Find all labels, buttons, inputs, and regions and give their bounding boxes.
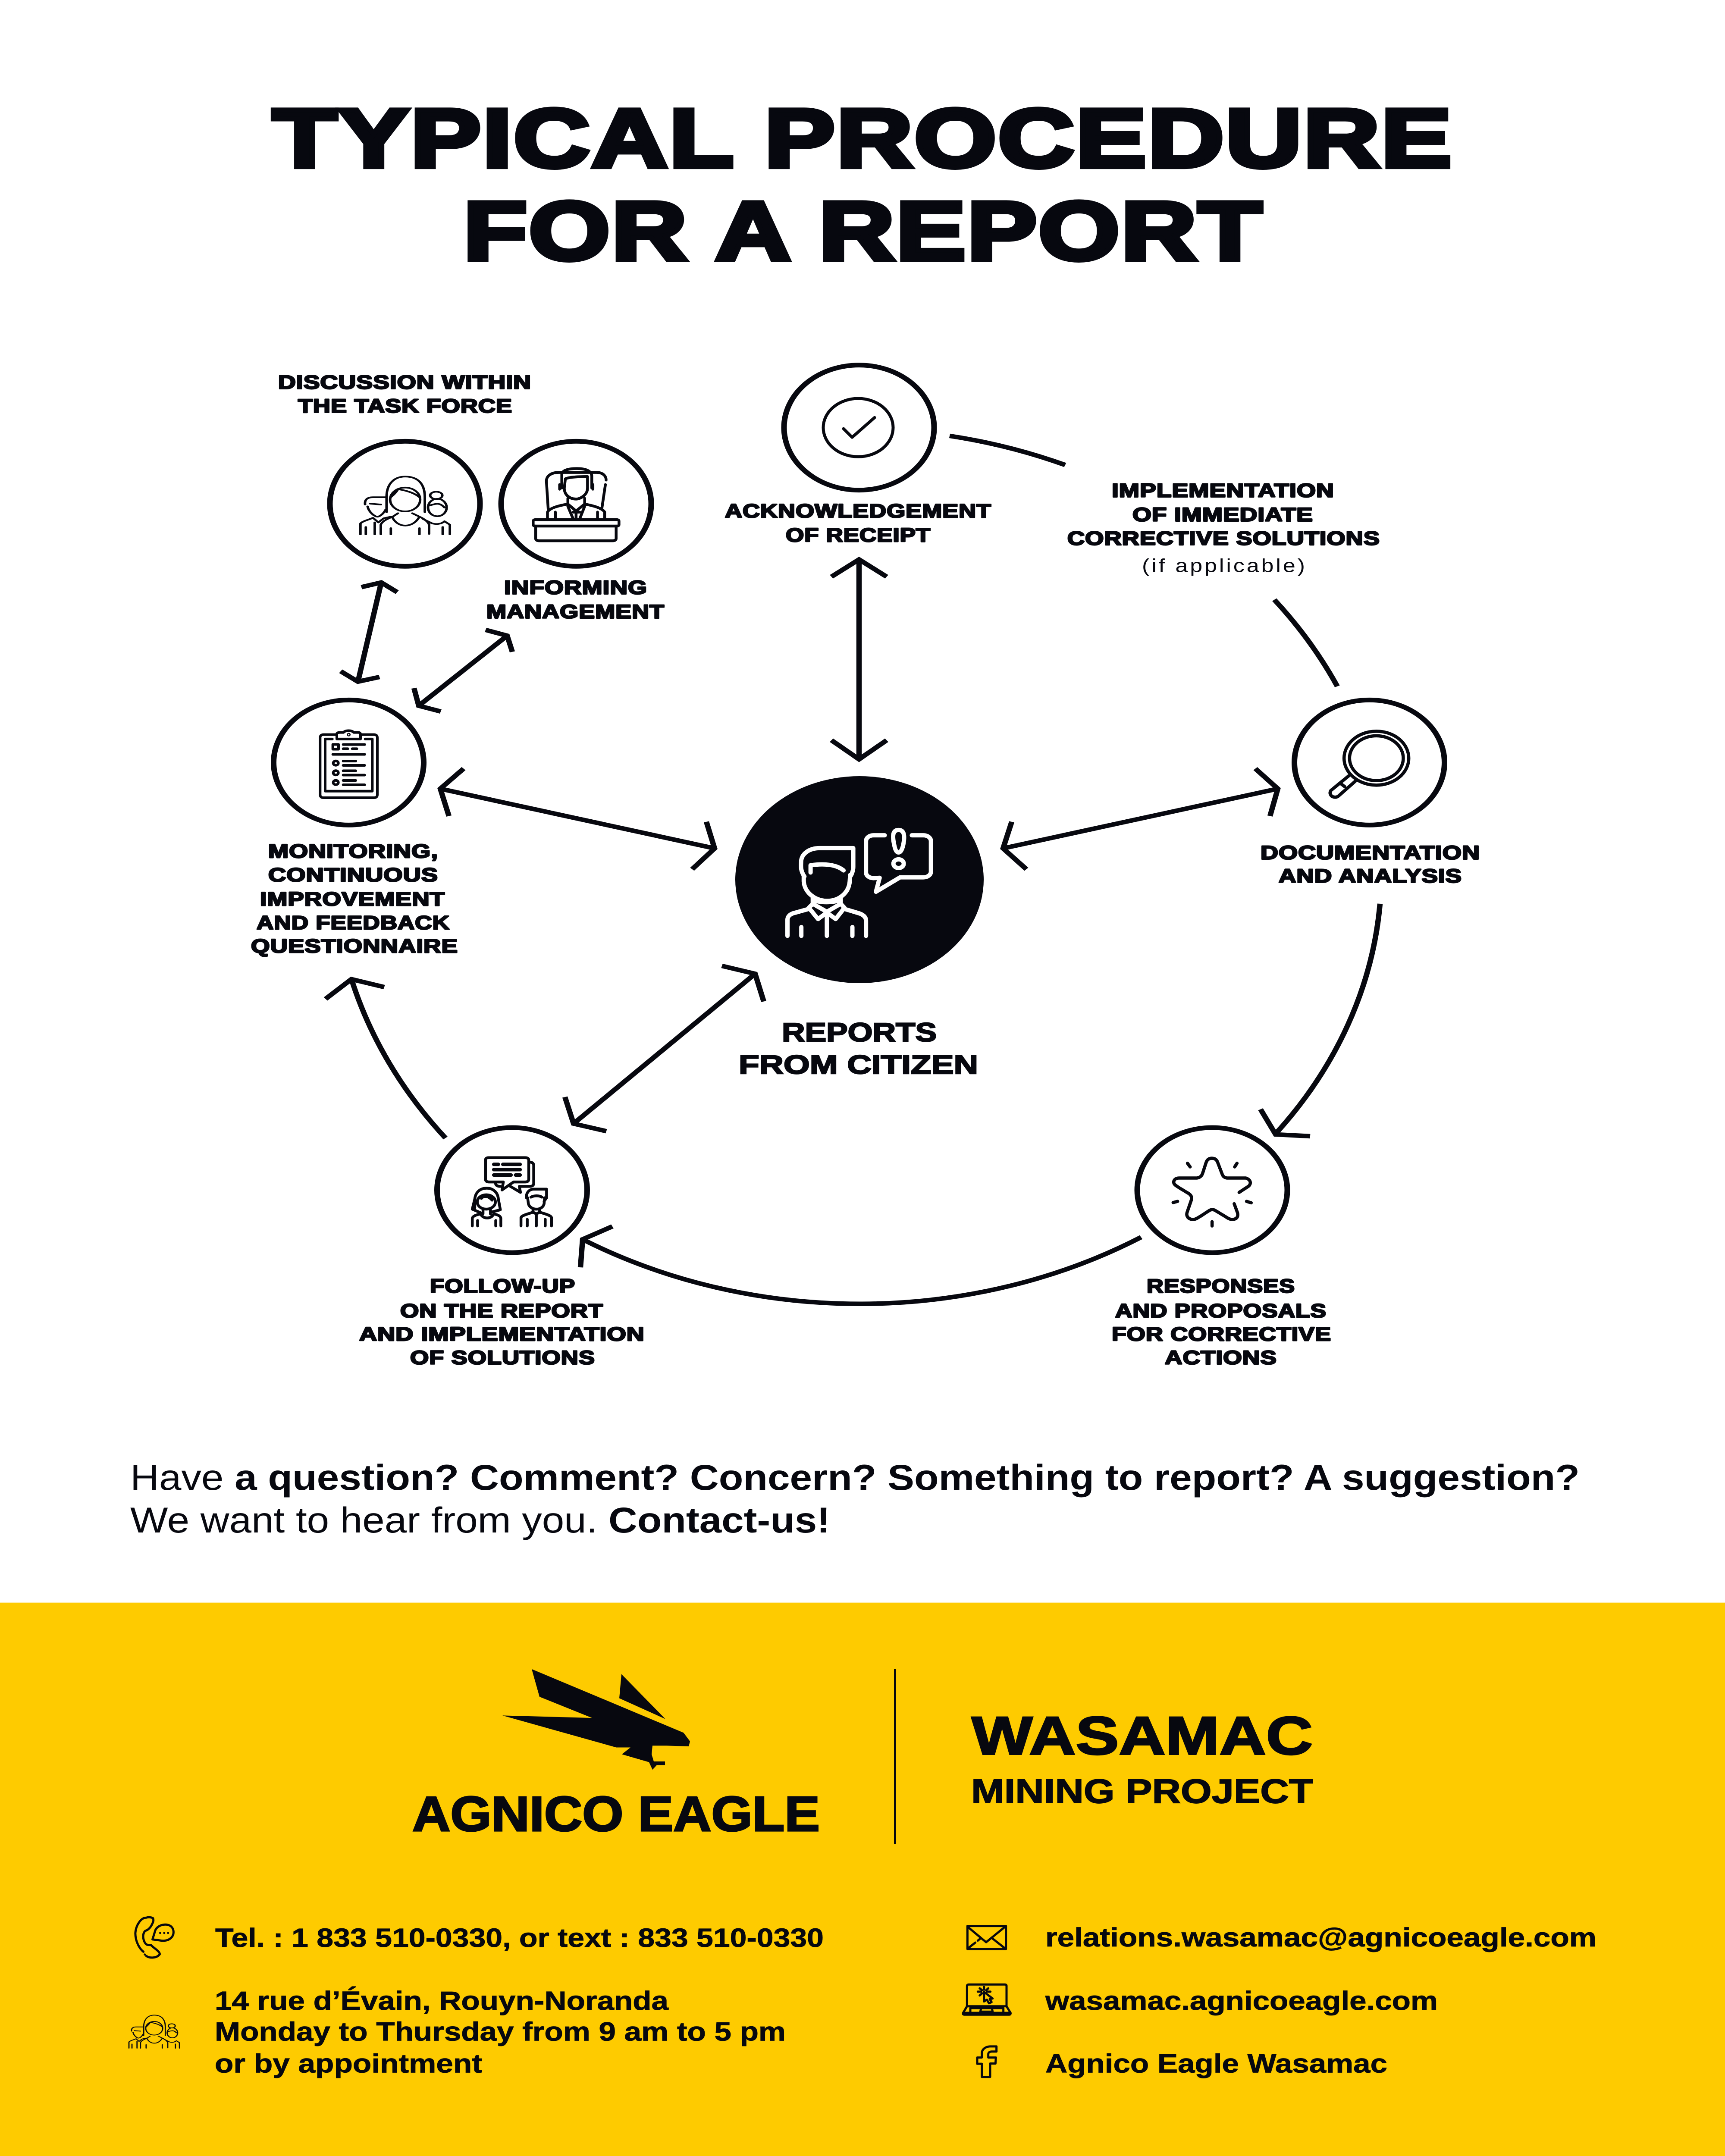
title [273, 92, 1453, 277]
label: discussion: DISCUSSION WITHIN [278, 372, 531, 393]
icon: laptop with cursor [963, 1984, 1010, 2015]
label: reports from citizen: REPORTS [782, 1018, 937, 1047]
icon: phone with chat bubble [135, 1917, 173, 1958]
label: responses: FOR CORRECTIVE [1112, 1324, 1331, 1345]
contact: facebook: Agnico Eagle Wasamac [1045, 2049, 1387, 2078]
label: responses: ACTIONS [1165, 1347, 1277, 1368]
label: discussion [278, 372, 531, 417]
logo: Agnico Eagle [412, 1669, 820, 1841]
node: discussion within the task force [278, 372, 531, 566]
node: informing management [486, 441, 665, 622]
label: monitoring: AND FEEDBACK [257, 912, 450, 934]
node: monitoring and feedback [251, 700, 458, 957]
cycle arcs and arrows [326, 436, 1380, 1304]
call to action text: Have a question? Comment? Concern? Something to report? A suggestion? [130, 1457, 1580, 1498]
label: reports from citizen: FROM CITIZEN [739, 1050, 978, 1080]
label: monitoring: QUESTIONNAIRE [251, 936, 458, 957]
icon: clipboard [320, 730, 377, 798]
node: documentation and analysis [1261, 700, 1480, 887]
node: acknowledgement of receipt [725, 365, 991, 546]
contact: email: relations.wasamac@agnicoeagle.com [1045, 1923, 1596, 1952]
arrow: documentation to responses [1261, 904, 1380, 1136]
label: monitoring: MONITORING, [268, 841, 438, 862]
project name: MINING PROJECT [971, 1772, 1313, 1810]
label: follow-up: OF SOLUTIONS [410, 1347, 595, 1368]
label: monitoring: CONTINUOUS [268, 865, 438, 886]
icon: group of people [361, 476, 450, 534]
label: documentation [1261, 843, 1480, 887]
label: informing: INFORMING [504, 577, 647, 598]
icon: group of people small [129, 2015, 179, 2048]
contact: address and hours: 14 rue d’Évain, Rouyn-Noranda [215, 1986, 669, 2015]
label: implementation of corrective solutions [1067, 480, 1380, 577]
label: implementation of corrective solutions: IMPLEMENTATION [1112, 480, 1334, 501]
icon: star [1173, 1158, 1251, 1226]
contact: address and hours [129, 1986, 786, 2078]
label: implementation of corrective solutions: (if applicable) [1142, 556, 1305, 577]
project name: WASAMAC [972, 1706, 1313, 1766]
label: discussion: THE TASK FORCE [298, 396, 512, 417]
label: monitoring [251, 841, 458, 957]
icon: citizen with alert speech bubble [787, 830, 931, 936]
label: follow-up [359, 1276, 645, 1368]
arc: acknowledgement to implementation [950, 436, 1065, 465]
logo: Agnico Eagle: AGNICO EAGLE [412, 1786, 820, 1841]
contact: phone [135, 1917, 824, 1958]
central node: reports from citizen [735, 776, 984, 1080]
node: responses and proposals [1112, 1128, 1331, 1368]
label: informing [486, 577, 665, 622]
node: follow-up on the report [359, 1128, 645, 1368]
icon: two people talking [472, 1158, 552, 1226]
double arrow: central to monitoring [440, 768, 715, 869]
footer panel [0, 1603, 1725, 2156]
label: acknowledgement: OF RECEIPT [786, 525, 931, 546]
icon: facebook f [977, 2046, 997, 2077]
contact: website: wasamac.agnicoeagle.com [1045, 1986, 1438, 2015]
project name [971, 1706, 1313, 1810]
label: acknowledgement: ACKNOWLEDGEMENT [725, 501, 991, 522]
contact: address and hours: Monday to Thursday from 9 am to 5 pm [215, 2017, 786, 2046]
double arrow: central to acknowledgement [831, 560, 887, 759]
label: follow-up: ON THE REPORT [400, 1300, 603, 1322]
label: responses [1112, 1276, 1331, 1368]
contact: phone: Tel. : 1 833 510-0330, or text : 833 510-0330 [215, 1923, 824, 1953]
double arrow: central to follow-up [565, 966, 764, 1131]
arrow: responses to follow-up [580, 1226, 1141, 1304]
divider [894, 1669, 896, 1844]
label: acknowledgement [725, 501, 991, 546]
label: follow-up: FOLLOW-UP [430, 1276, 575, 1297]
title: TYPICAL PROCEDURE [273, 92, 1453, 184]
label: documentation: AND ANALYSIS [1279, 866, 1462, 887]
label: monitoring: IMPROVEMENT [260, 889, 445, 910]
label: follow-up: AND IMPLEMENTATION [359, 1324, 645, 1345]
label: reports from citizen [739, 1018, 978, 1080]
icon: eagle [502, 1669, 690, 1770]
icon: envelope [967, 1926, 1006, 1949]
label: documentation: DOCUMENTATION [1261, 843, 1480, 863]
icon: magnifying glass [1330, 731, 1409, 797]
double arrow: central to documentation [1003, 768, 1278, 869]
arc: implementation to documentation [1274, 600, 1337, 686]
arrow: follow-up to monitoring [326, 979, 445, 1138]
label: implementation of corrective solutions: CORRECTIVE SOLUTIONS [1067, 528, 1380, 549]
contact: address and hours: or by appointment [215, 2049, 482, 2078]
call to action text: We want to hear from you. Contact-us! [130, 1500, 830, 1540]
label: implementation of corrective solutions: OF IMMEDIATE [1132, 504, 1313, 525]
call to action text [130, 1457, 1580, 1540]
double arrow: monitoring to informing [414, 630, 512, 711]
title: FOR A REPORT [464, 185, 1264, 277]
icon: executive at desk [533, 469, 619, 541]
label: responses: AND PROPOSALS [1115, 1300, 1327, 1322]
icon: check mark in circle [823, 398, 893, 457]
label: responses: RESPONSES [1147, 1276, 1295, 1297]
double arrow: monitoring to discussion [341, 583, 397, 682]
label: informing: MANAGEMENT [486, 601, 665, 622]
